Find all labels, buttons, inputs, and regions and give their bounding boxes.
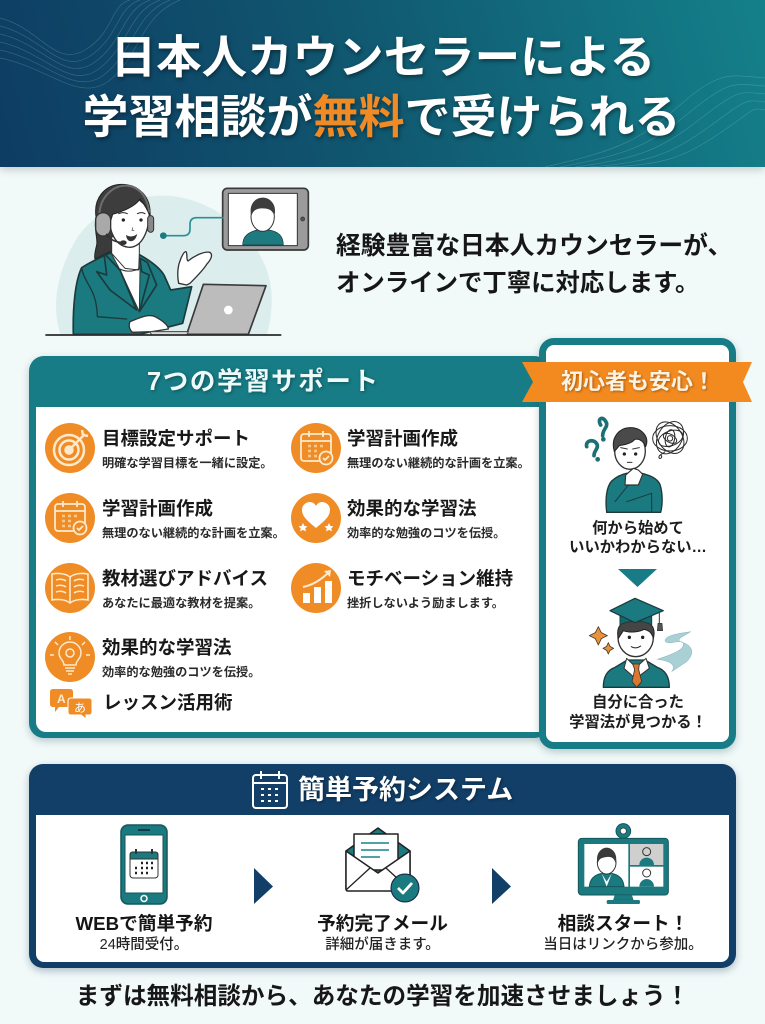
support item: motivation	[291, 563, 513, 613]
intro text: 経験豊富な日本人カウンセラーが、	[336, 233, 732, 260]
arrow: step 1 to 2	[254, 868, 273, 904]
support item: study plan right	[291, 423, 530, 473]
text: not sure where to start	[569, 520, 707, 556]
title: 学習相談が無料で受けられる	[82, 91, 680, 143]
support item: lesson usage: あ	[74, 699, 86, 716]
hand typing	[129, 316, 168, 332]
support item: effective methods right: 効率的な勉強のコツを伝授。	[347, 526, 505, 540]
support item: study plan left: 学習計画作成	[102, 498, 213, 519]
text: not sure where to start: 何から始めて	[592, 520, 684, 537]
support item: textbook advice	[45, 563, 268, 613]
panel heading: 7つの学習サポート	[147, 368, 380, 396]
support item: effective methods right: 効果的な学習法	[347, 498, 477, 519]
title	[0, 0, 765, 167]
closing message: まずは無料相談から、あなたの学習を加速させましょう！	[76, 984, 689, 1010]
support item: effective methods right	[291, 493, 505, 543]
title: 日本人カウンセラーによる	[111, 32, 655, 83]
header banner	[0, 0, 765, 167]
text: find your method	[569, 694, 707, 731]
step: start consultation	[543, 823, 703, 953]
arrow: down triangle	[618, 569, 657, 587]
step: web booking	[75, 824, 213, 953]
arrow: step 2 to 3	[492, 868, 511, 904]
illustration: confused learner	[584, 416, 688, 513]
support item: textbook advice: あなたに最適な教材を提案。	[102, 596, 260, 610]
illustration: counselor with laptop and tablet	[45, 184, 310, 336]
support item: motivation: 挫折しないよう励まします。	[347, 596, 504, 610]
step: confirmation mail	[317, 827, 448, 953]
hand raised	[178, 252, 212, 285]
step: web booking: 24時間受付。	[100, 937, 188, 953]
panel body	[36, 407, 549, 732]
ribbon: beginners: 初心者も安心！	[561, 369, 715, 394]
hair front	[96, 184, 150, 225]
text: find your method: 自分に合った	[592, 694, 684, 711]
step: web booking: WEBで簡単予約	[75, 913, 213, 934]
support item: goal setting	[45, 423, 273, 473]
headset	[99, 186, 149, 215]
jacket	[73, 252, 192, 334]
support item: goal setting: 明確な学習目標を一緒に設定。	[102, 456, 273, 470]
intro text	[336, 232, 732, 297]
support item: motivation: モチベーション維持	[347, 568, 513, 589]
woman hair back	[95, 208, 120, 259]
support item: effective methods left	[45, 632, 260, 682]
tablet	[223, 188, 308, 250]
text: find your method: 学習法が見つかる！	[569, 714, 707, 731]
panel: easy booking system	[29, 764, 736, 968]
support item: study plan right: 学習計画作成	[347, 428, 458, 449]
support item: goal setting: 目標設定サポート	[102, 428, 250, 449]
support item: study plan right: 無理のない継続的な計画を立案。	[347, 456, 530, 470]
support item: textbook advice: 教材選びアドバイス	[102, 568, 268, 589]
step: start consultation: 当日はリンクから参加。	[543, 937, 703, 953]
support item: lesson usage: A	[57, 692, 66, 706]
ribbon: beginners	[522, 362, 752, 402]
support item: effective methods left: 効率的な勉強のコツを伝授。	[102, 665, 260, 679]
panel: beginners welcome	[539, 338, 736, 749]
booking heading: 簡単予約システム	[298, 775, 513, 805]
panel: 7 learning supports	[29, 356, 549, 738]
support item: effective methods left: 効果的な学習法	[102, 637, 232, 658]
text: not sure where to start: いいかわからない…	[569, 539, 707, 556]
support item: study plan left: 無理のない継続的な計画を立案。	[102, 526, 285, 540]
illustration: graduate learner	[588, 598, 692, 688]
laptop	[187, 284, 266, 334]
step: start consultation: 相談スタート！	[558, 913, 688, 934]
support item: lesson usage: レッスン活用術	[103, 692, 233, 713]
support item: lesson usage	[50, 689, 233, 718]
face	[112, 237, 139, 270]
icon: calendar	[252, 771, 288, 809]
intro text: オンラインで丁寧に対応します。	[336, 270, 699, 297]
support item: study plan left	[45, 493, 285, 543]
step: confirmation mail: 詳細が届きます。	[325, 937, 440, 953]
booking body	[36, 815, 729, 962]
step: confirmation mail: 予約完了メール	[317, 913, 448, 934]
